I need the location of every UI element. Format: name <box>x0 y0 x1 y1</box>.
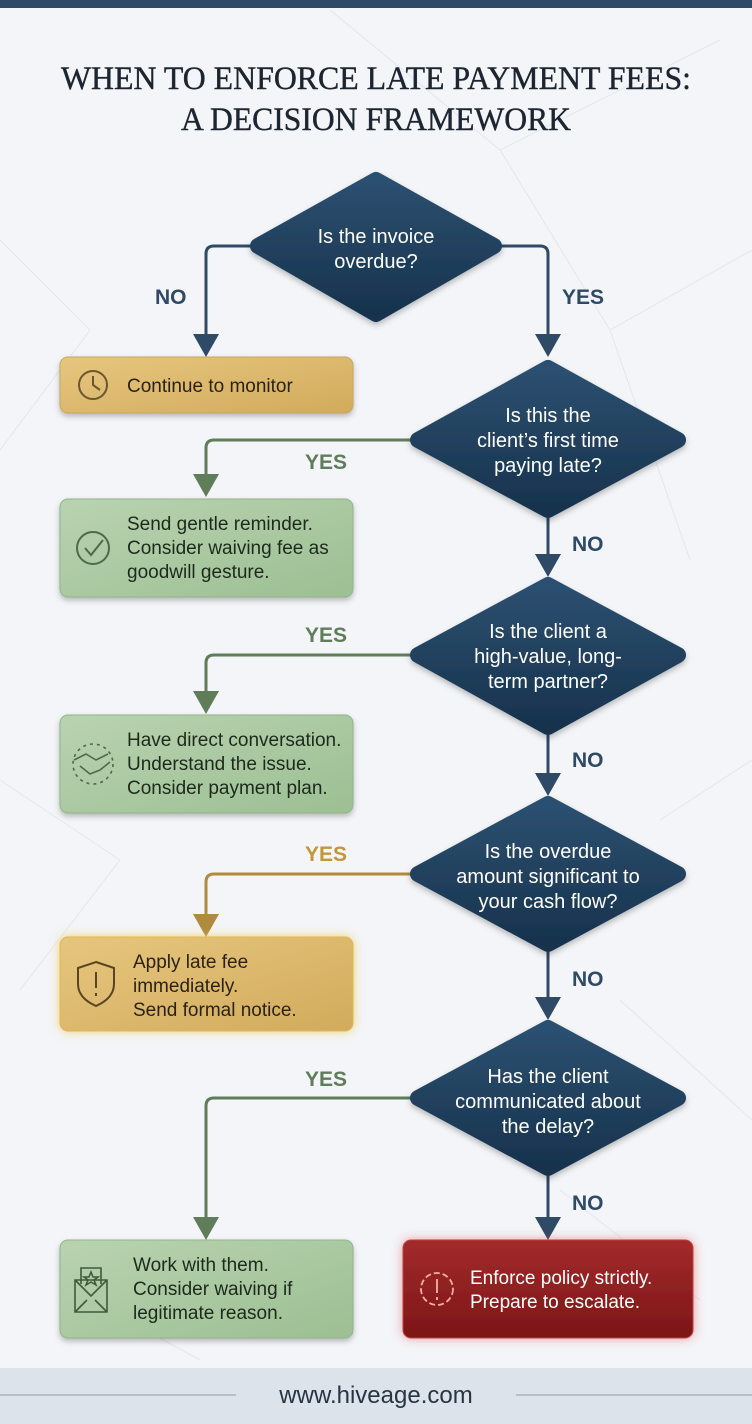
diamond 5: Has the client <box>487 1066 609 1088</box>
box: direct conversation: Understand the issue. <box>127 754 312 775</box>
labels: YES <box>305 451 347 474</box>
diamond 5: the delay? <box>502 1116 594 1138</box>
diamond 3 <box>418 585 678 727</box>
diamond 4: Is the overdue <box>485 841 611 863</box>
box: gentle reminder: Consider waiving fee as <box>127 538 329 559</box>
box: work with them: legitimate reason. <box>133 1303 283 1324</box>
title <box>61 61 691 138</box>
box: work with them: Consider waiving if <box>133 1279 293 1300</box>
icon: alert gear <box>421 1273 453 1305</box>
labels: NO <box>572 968 604 991</box>
diamond 1: overdue? <box>334 251 418 273</box>
box: work with them <box>60 1240 353 1338</box>
icon: envelope <box>75 1268 107 1312</box>
diamond 2: paying late? <box>494 455 602 477</box>
icon: handshake <box>73 744 113 784</box>
diamond 4: amount significant to <box>456 866 640 888</box>
connectors <box>206 246 548 1228</box>
box: apply late fee: immediately. <box>133 976 238 997</box>
box: direct conversation <box>60 715 353 813</box>
diamond 3: high-value, long- <box>474 646 622 668</box>
box: enforce policy <box>403 1240 693 1338</box>
diamond 5 <box>418 1028 678 1168</box>
labels: YES <box>305 624 347 647</box>
labels: YES <box>305 1068 347 1091</box>
labels: NO <box>572 533 604 556</box>
diamond 3: term partner? <box>488 671 608 693</box>
title: A DECISION FRAMEWORK <box>181 102 571 138</box>
diamond 2: Is this the <box>505 405 591 427</box>
arrowheads <box>193 334 561 1240</box>
box: continue to monitor: Continue to monitor <box>127 376 293 397</box>
box: apply late fee: Apply late fee <box>133 952 248 973</box>
icon: clock <box>79 371 107 399</box>
box: apply late fee <box>60 937 353 1031</box>
icon: check <box>77 532 109 564</box>
labels: NO <box>155 286 186 309</box>
title: WHEN TO ENFORCE LATE PAYMENT FEES: <box>61 61 691 97</box>
diamond 3: Is the client a <box>489 621 608 643</box>
box: direct conversation: Have direct conversation. <box>127 730 341 751</box>
diamond 1: Is the invoice <box>318 226 434 248</box>
labels: YES <box>305 843 347 866</box>
icon: shield <box>78 962 114 1006</box>
footer: www.hiveage.com <box>278 1382 473 1409</box>
diamond 4: your cash flow? <box>479 891 617 913</box>
box: gentle reminder: goodwill gesture. <box>127 562 270 583</box>
diamond 5: communicated about <box>455 1091 641 1113</box>
labels: NO <box>572 749 604 772</box>
labels: NO <box>572 1192 604 1215</box>
footer <box>0 1368 752 1424</box>
diamond 2 <box>418 368 678 510</box>
box: direct conversation: Consider payment plan. <box>127 778 328 799</box>
box: apply late fee: Send formal notice. <box>133 1000 297 1021</box>
diamond 2: client’s first time <box>477 430 619 452</box>
box: enforce policy: Enforce policy strictly. <box>470 1268 652 1289</box>
diamond 1 <box>258 180 494 314</box>
labels <box>155 286 604 1215</box>
box: continue to monitor <box>60 357 353 413</box>
box: gentle reminder: Send gentle reminder. <box>127 514 313 535</box>
box: gentle reminder <box>60 499 353 597</box>
labels: YES <box>562 286 604 309</box>
diamond 4 <box>418 804 678 944</box>
box: work with them: Work with them. <box>133 1255 269 1276</box>
box: enforce policy: Prepare to escalate. <box>470 1292 640 1313</box>
